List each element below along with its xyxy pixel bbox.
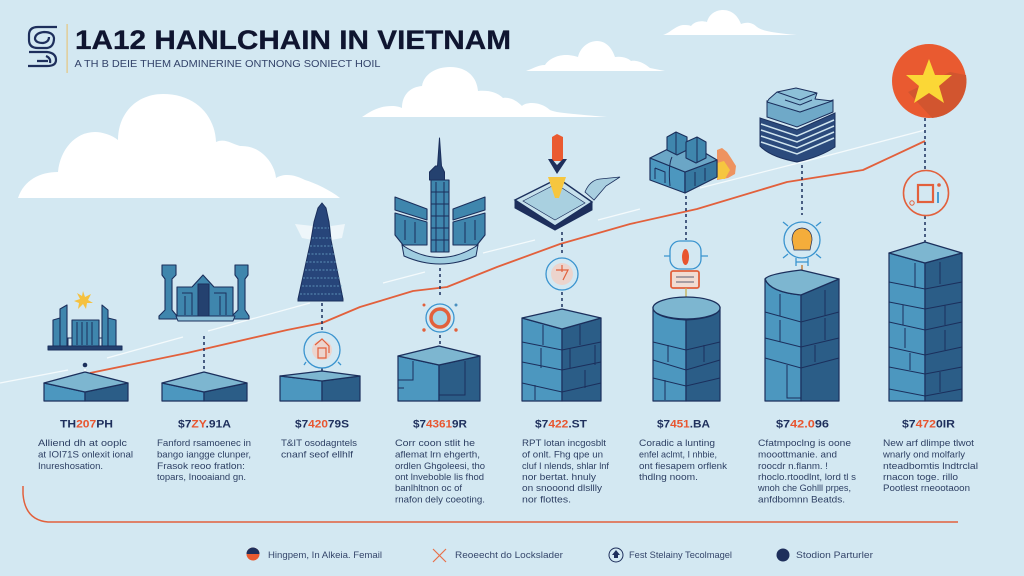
column 4: spired palace on bar: [395, 138, 485, 504]
value 2: $7ZY.91A: [178, 418, 231, 430]
value 1: TH207PH: [60, 418, 113, 430]
description 7: wnoh che Gohlll prpes,: [757, 483, 851, 493]
icon: factory: [650, 132, 717, 193]
column 3: tower on bar: [280, 203, 360, 460]
bar 6: [653, 297, 720, 401]
description 8: nteadbomtis lndtrclal: [883, 461, 978, 471]
value 5: $7422.ST: [535, 418, 587, 430]
cloud: top right: [663, 10, 797, 35]
description 1: at IOI71S onlexit ional: [38, 450, 133, 460]
dashed connector 2: [203, 336, 205, 372]
description 3: T&IT osodagntels: [281, 438, 357, 448]
column 1: monument on short bar: [38, 291, 133, 471]
column 6: factory on round bar: [639, 132, 736, 482]
bar 4: [398, 346, 480, 401]
description 4: ordlen Ghgoleesi, tho: [395, 461, 485, 471]
description 2: Fanford rsamoenec in: [157, 438, 251, 448]
description 7: [757, 438, 856, 504]
cloud: middle: [362, 67, 607, 117]
description 2: bango iangge clunper,: [157, 450, 251, 460]
value 7: $742.0 96: [776, 418, 829, 430]
description 5: on snooond dlsllly: [522, 483, 602, 493]
bar 7: [765, 270, 839, 401]
orange baseline bracket: [23, 486, 958, 522]
icon: monument: [48, 305, 122, 350]
description 6: [639, 438, 727, 482]
icon: orange ring target: [422, 304, 458, 332]
marker pin: [81, 363, 89, 380]
description 8: Pootlest rneootaoon: [883, 483, 970, 493]
description 7: mooottmanie. and: [758, 450, 837, 460]
bar 8: [889, 242, 962, 401]
icon: palace: [395, 138, 485, 264]
description 1: [38, 438, 133, 471]
legend item 2: Reoeecht do Lockslader: [455, 550, 563, 560]
icon: orange gear in circle: [304, 332, 341, 368]
icon: gold star: [74, 291, 93, 309]
icon: temple: [159, 265, 249, 321]
white growth line: [0, 130, 925, 383]
subtitle: A TH B DEIE THEM ADMINERINE ONTNONG SONIECT HOIL: [74, 58, 381, 70]
legend item 3: [609, 548, 732, 562]
legend item 3: Fest Stelainy Tecolmagel: [629, 550, 732, 560]
description 7: anfdbomnn Beatds.: [758, 494, 845, 504]
legend item 4: [776, 548, 873, 562]
value 3: $742079S: [295, 418, 349, 430]
icon: orange mark in circle: [546, 258, 578, 290]
description 8: New arf dlimpe tlwot: [883, 438, 974, 448]
icon: orange ring square: [904, 170, 948, 216]
icon: office block: [760, 88, 835, 162]
description 4: banlhltnon oc of: [395, 483, 462, 493]
bar 1: [44, 372, 128, 401]
icon: light bulb: [783, 222, 821, 274]
description 6: Coradic a lunting: [639, 438, 715, 448]
icon: yellow funnel: [548, 177, 566, 198]
bar 5: [522, 309, 601, 401]
description 1: Inureshosation.: [38, 461, 103, 471]
description 6: thdlng noom.: [639, 472, 698, 482]
column 7: office block on bar: [757, 88, 856, 504]
legend: [246, 548, 873, 562]
description 7: rhoclo.rtoodlnt, lord tl s: [758, 472, 856, 482]
legend item 1: Hingpem, In Alkeia. Femail: [268, 550, 382, 560]
description 3: cnanf seof ellhlf: [281, 450, 354, 460]
description 5: RPT lotan incgosblt: [522, 438, 606, 448]
description 4: Corr coon stlit he: [395, 438, 475, 448]
legend item 2: [433, 549, 563, 562]
dashed connector 3: [321, 303, 323, 373]
description 3: [281, 438, 357, 460]
description 4: [395, 438, 485, 504]
icon: red arrow: [548, 134, 567, 174]
legend item 1: [246, 548, 382, 560]
description 1: Alliend dh at ooplc: [38, 438, 127, 448]
dashed connector 8: [924, 118, 926, 242]
description 7: roocdr n.flanm. !: [758, 461, 828, 471]
icon: flask target: [664, 241, 708, 269]
column 5: device on bar: [515, 134, 620, 504]
description 6: enfel aclmt, I nhbie,: [639, 450, 717, 460]
dashed connector 7: [801, 165, 803, 215]
description 2: topars, Inooaiand gn.: [157, 472, 246, 482]
cloud: large left: [18, 94, 340, 198]
dashed connector 4: [439, 268, 441, 346]
description 4: aflemat lrn ehgerth,: [395, 450, 480, 460]
title: 1A12 HANLCHAIN IN VIETNAM: [75, 25, 511, 55]
description 5: nor bertat. hnuly: [522, 472, 596, 482]
description 8: wnarly ond molfarly: [882, 450, 965, 460]
description 2: [157, 438, 251, 482]
value 8: $74720IR: [902, 418, 955, 430]
icon: flame: [717, 148, 736, 180]
description 5: cluf I nlends, shlar lnf: [522, 461, 609, 471]
dashed connector 5: [561, 232, 563, 310]
column 2: temple on short bar: [157, 265, 251, 482]
value 6: $7451.BA: [657, 418, 710, 430]
description 2: Frasok reoo fratlon:: [157, 461, 245, 471]
description 5: of onlt. Fhg qpe un: [522, 450, 603, 460]
description 5: [522, 438, 609, 504]
logo divider: [66, 24, 68, 73]
description 5: nor flottes.: [522, 494, 571, 504]
description 8: [882, 438, 978, 493]
logo: [28, 27, 57, 66]
description 7: Cfatmpoclng is oone: [758, 438, 851, 448]
icon: Vietnam flag circle: [892, 44, 967, 118]
description 8: rnacon toge. rillo: [883, 472, 958, 482]
bar 2: [162, 372, 247, 401]
cloud: small: [526, 41, 665, 71]
icon: router device: [515, 177, 620, 230]
icon: orange sign: [671, 271, 699, 306]
orange growth line: [90, 141, 925, 373]
column 8: flag and tallest bar: [882, 44, 978, 493]
icon: tower: [295, 203, 345, 301]
description 4: rnafon dely coeoting.: [395, 494, 485, 504]
bar 3: [280, 371, 360, 401]
value 4: $743619R: [413, 418, 467, 430]
dashed connector 6: [685, 196, 687, 240]
description 6: ont fiesapem orflenk: [639, 461, 727, 471]
description 4: ont lnveboble lis fhod: [395, 472, 484, 482]
legend item 4: Stodion Parturler: [796, 550, 873, 560]
